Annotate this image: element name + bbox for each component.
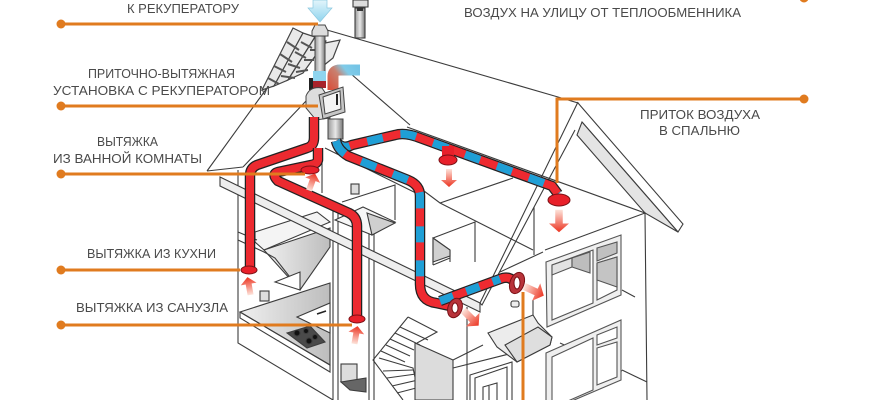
label: bedroom supply: В СПАЛЬНЮ: [659, 123, 740, 138]
leader: living room supply: [522, 292, 524, 400]
supply duct to second outlet: [440, 278, 515, 301]
staircase: [373, 317, 517, 400]
supply ducts red and blue: [336, 134, 558, 306]
exhaust duct to kitchen: [250, 117, 314, 268]
chimney: [353, 0, 368, 38]
recuperator unit and vent stack: [306, 0, 360, 139]
supply duct to bedroom: [336, 134, 558, 194]
red exhaust ducts: [250, 117, 357, 318]
label: to recuperator: К РЕКУПЕРАТОРУ: [127, 1, 240, 16]
leader: bedroom supply: [557, 94, 808, 183]
door: [470, 362, 512, 400]
label: bedroom supply: [640, 107, 760, 138]
roof tiles: [262, 28, 340, 90]
label: bathroom exhaust: ВЫТЯЖКА: [97, 134, 158, 149]
label: toilet exhaust: ВЫТЯЖКА ИЗ САНУЗЛА: [76, 300, 228, 315]
interior kitchen and bathroom walls: [220, 148, 480, 400]
label: bathroom exhaust: [53, 134, 202, 166]
icon: intake cap: [312, 25, 328, 72]
duct outlets: [241, 146, 570, 323]
label: bathroom exhaust: ИЗ ВАННОЙ КОМНАТЫ: [53, 151, 202, 166]
small wall socket: [511, 301, 519, 307]
house line drawing: [207, 0, 683, 400]
wall grilles: [260, 184, 366, 392]
label: recuperator unit: ПРИТОЧНО-ВЫТЯЖНАЯ: [88, 66, 235, 81]
label: recuperator unit: УСТАНОВКА С РЕКУПЕРАТОРОМ: [53, 83, 270, 98]
leader: to recuperator: [56, 20, 318, 28]
upper window: [546, 235, 621, 327]
recuperator body: [306, 87, 345, 120]
leader: recuperator unit: [56, 102, 318, 110]
supply duct to first floor outlet: [336, 141, 450, 306]
right wall and interior partitions: [433, 207, 647, 400]
label: recuperator unit: [53, 66, 270, 98]
lower window: [546, 320, 621, 400]
leader: kitchen exhaust: [56, 266, 240, 274]
leader: toilet exhaust: [56, 320, 352, 330]
exhaust duct to bathroom and toilet: [274, 148, 357, 318]
main roof: [207, 30, 683, 305]
label: bedroom supply: ПРИТОК ВОЗДУХА: [640, 107, 760, 122]
inner blue and red connector: [309, 71, 326, 90]
lower collar: [328, 119, 343, 139]
label: kitchen exhaust: ВЫТЯЖКА ИЗ КУХНИ: [87, 246, 216, 261]
sofa: [488, 315, 552, 362]
kitchen stove: [287, 326, 325, 348]
airflow arrows: [240, 169, 569, 345]
outlet elbow pipe: [333, 70, 360, 90]
label: outdoor air from heat exchanger: ВОЗДУХ НА УЛИЦУ ОТ ТЕПЛООБМЕННИКА: [464, 5, 741, 20]
icon: blue air arrow in: [308, 0, 332, 22]
leader: bathroom exhaust: [56, 170, 305, 178]
leader: outdoor air top right: [800, 0, 808, 2]
